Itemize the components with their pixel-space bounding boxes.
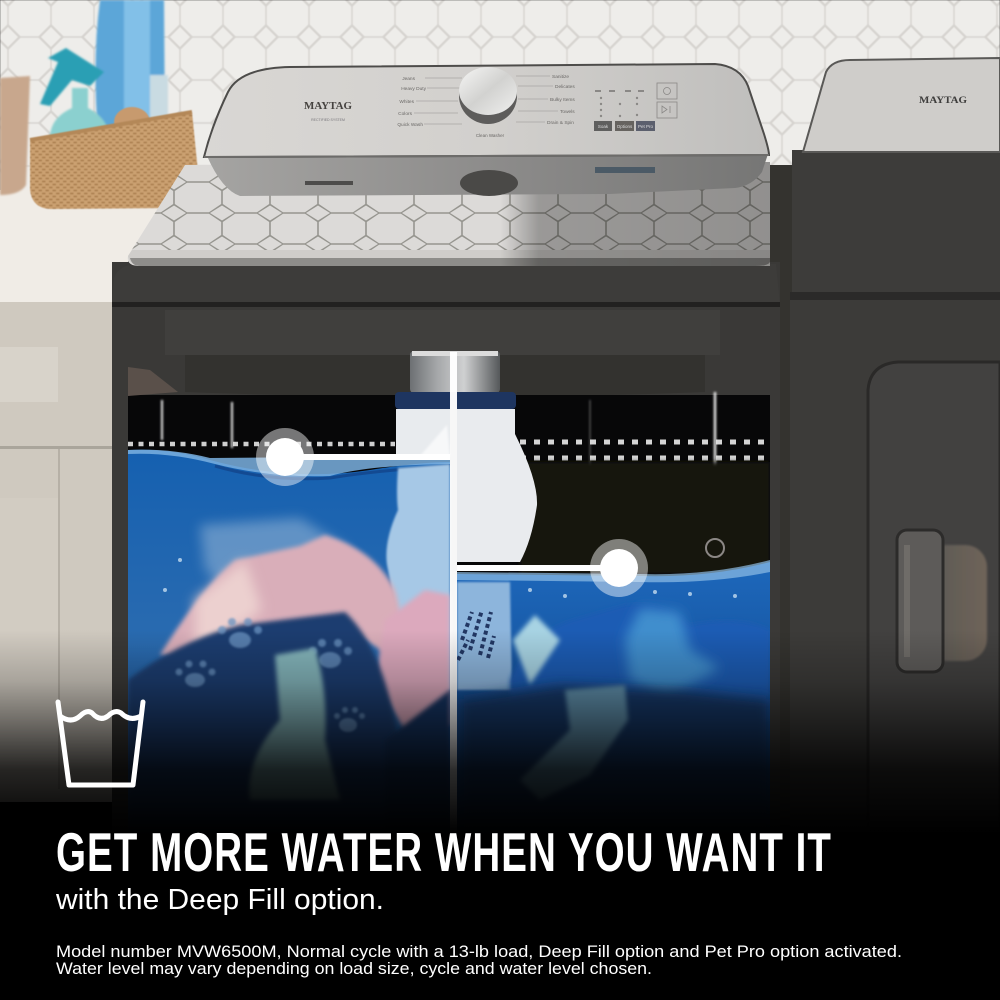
footnote <box>56 943 902 978</box>
tub perforation dots <box>128 442 770 458</box>
right cycle labels: Bulky Items <box>550 97 575 103</box>
right tub shading <box>520 462 770 574</box>
right cycle labels <box>547 74 575 126</box>
paw prints <box>176 618 365 732</box>
agitator collar <box>395 392 516 409</box>
left cycle labels: Heavy Duty <box>401 86 427 92</box>
dark cloth centre <box>396 688 450 768</box>
clean washer label: Clean Washer <box>476 133 505 138</box>
panel logo: MAYTAG <box>304 101 352 112</box>
gap between washers <box>770 165 800 840</box>
reflected knob <box>460 170 518 196</box>
bubbles <box>163 558 737 598</box>
right washer logo: MAYTAG <box>919 96 968 106</box>
left water dark line <box>215 466 450 479</box>
wicker basket <box>30 107 198 209</box>
left cycle labels <box>397 76 427 128</box>
footnote: Model number MVW6500M, Normal cycle with a 13-lb load, Deep Fill option and Pet Pro option activated. <box>56 943 902 961</box>
spray bottle <box>40 48 110 138</box>
right level marker <box>590 539 648 597</box>
reflected logo <box>305 181 353 185</box>
footnote: Water level may vary depending on load size, cycle and water level chosen. <box>56 960 652 978</box>
glass lid <box>128 162 770 266</box>
tub top rim <box>128 367 178 396</box>
status indicators <box>595 90 644 117</box>
bottom black band <box>0 835 1000 1000</box>
left water surface <box>128 450 450 476</box>
water level divider <box>285 352 619 842</box>
control panel reflection <box>207 154 768 196</box>
option buttons <box>594 121 655 131</box>
option buttons: Options <box>617 124 633 129</box>
power and start buttons <box>657 83 677 118</box>
right water <box>457 562 770 798</box>
washer body <box>112 262 780 840</box>
agitator body <box>396 409 537 562</box>
navy pawprint cloth <box>128 608 396 758</box>
detergent bottle <box>95 0 168 137</box>
tub reflections <box>159 390 718 466</box>
left level marker <box>256 428 314 486</box>
reflected buttons <box>595 167 655 173</box>
right cycle labels: Delicates <box>555 84 575 90</box>
left cycle labels: Quick Wash <box>397 122 423 128</box>
panel sublabel: RECTIFIED SYSTEM <box>311 118 345 122</box>
wash tub cutaway <box>128 351 770 840</box>
subheading: with the Deep Fill option. <box>55 884 384 916</box>
door handle <box>897 530 987 672</box>
bottom dark fade <box>0 630 1000 835</box>
agitator under water left <box>386 464 450 690</box>
left cycle labels: Whites <box>399 99 415 105</box>
right cycle labels: Sanitize <box>552 74 569 80</box>
pale sock left <box>249 648 340 800</box>
control panel <box>204 64 769 157</box>
light blue towel <box>625 608 720 700</box>
tiled wall <box>0 0 1000 210</box>
option buttons: Soak <box>598 124 609 129</box>
left water <box>128 450 450 782</box>
royal blue towels <box>506 628 770 702</box>
right washer <box>790 58 1000 840</box>
pink cloth <box>160 535 401 660</box>
cabinets <box>0 302 114 802</box>
pale sock right <box>520 685 628 800</box>
pale background cloth <box>194 512 346 581</box>
agitator under water right <box>457 582 512 690</box>
right washer door <box>868 362 1000 830</box>
right cycle labels: Drain & Spin <box>547 120 574 126</box>
right water surface <box>457 560 770 582</box>
navy cloth right <box>457 678 770 762</box>
pink crumpled cloth <box>375 590 450 730</box>
countertop <box>0 190 190 302</box>
left cycle labels: Jeans <box>402 76 416 82</box>
agitator cap <box>410 351 500 393</box>
right cycle labels: Towels <box>560 109 575 115</box>
cup on the counter <box>0 76 30 195</box>
left cycle labels: Colors <box>398 111 413 117</box>
pale pink cloth <box>195 560 262 660</box>
cycle tick lines <box>414 76 558 124</box>
icon: wash basin <box>58 702 143 785</box>
option buttons: Pet Pro <box>638 124 653 129</box>
dial knob <box>459 67 517 124</box>
pale cloth right <box>513 615 560 685</box>
